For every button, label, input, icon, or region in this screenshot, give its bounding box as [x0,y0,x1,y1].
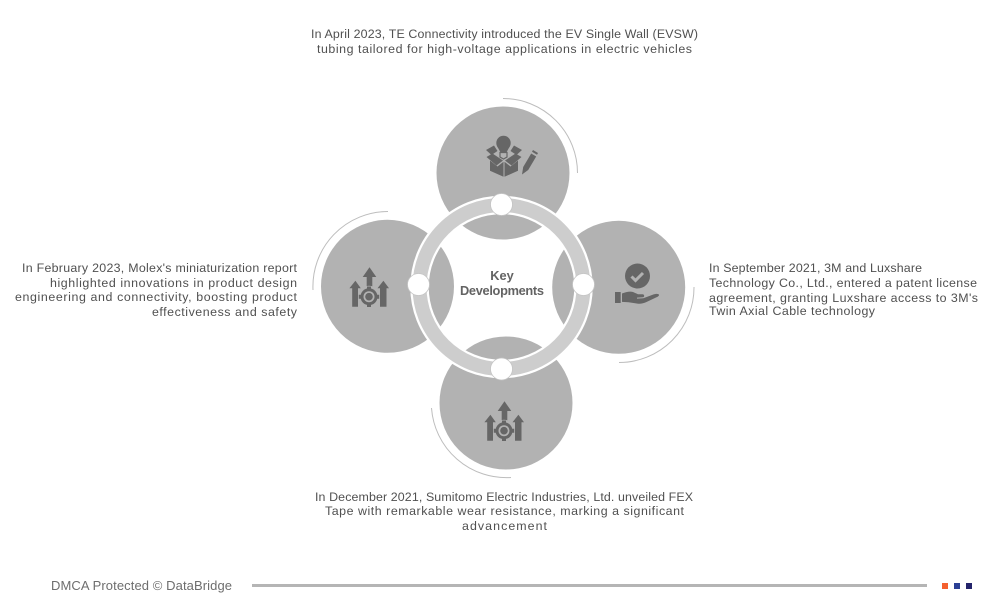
node: bottom [490,358,512,380]
icon: box with lightbulb and pencil [486,136,538,177]
text: right development [709,261,978,318]
central ring [420,205,584,369]
circle: right [552,221,685,354]
arc: bottom circle accent [432,408,511,478]
text: right development: Twin Axial Cable technology [709,304,876,318]
text: right development: agreement, granting Luxshare access to 3M's [709,291,978,305]
text: top development: tubing tailored for high-voltage applications in electric vehicles [317,42,692,56]
icon: arrows and gear left [349,267,389,308]
arc: right circle accent [619,287,694,362]
footer squares [942,583,972,589]
node: top [490,194,512,216]
footer text: DMCA Protected © DataBridge [51,578,232,593]
footer line [252,584,927,587]
arc: left circle accent [313,211,388,290]
text: bottom development: In December 2021, Sumitomo Electric Industries, Ltd. unveiled FEX [315,490,693,504]
text: top development: In April 2023, TE Connectivity introduced the EV Single Wall (EVSW) [311,27,698,41]
circle: left [321,220,454,353]
heading: key developments: Key [490,268,515,283]
text: right development: Technology Co., Ltd., entered a patent license [709,276,977,290]
text: left development: effectiveness and safety [152,305,298,319]
text: bottom development [315,490,693,533]
text: bottom development: Tape with remarkable wear resistance, marking a significant [325,504,685,518]
text: bottom development: advancement [462,519,548,533]
node: left [408,274,430,296]
text: left development: In February 2023, Molex's miniaturization report [22,261,298,275]
circle: bottom [440,336,572,470]
text: top development [311,27,698,56]
text: right development: In September 2021, 3M and Luxshare [709,261,922,275]
icon: hand holding check badge [615,264,659,304]
heading: key developments [460,268,544,298]
text: left development: engineering and connectivity, boosting product [15,290,298,304]
text: left development [15,261,298,319]
icon: arrows and gear bottom [484,401,524,442]
text: left development: highlighted innovations in product design [50,276,297,290]
node: right [572,274,594,296]
circle: top [436,106,570,240]
heading: key developments: Developments [460,283,544,298]
arc: top circle accent [503,98,578,173]
